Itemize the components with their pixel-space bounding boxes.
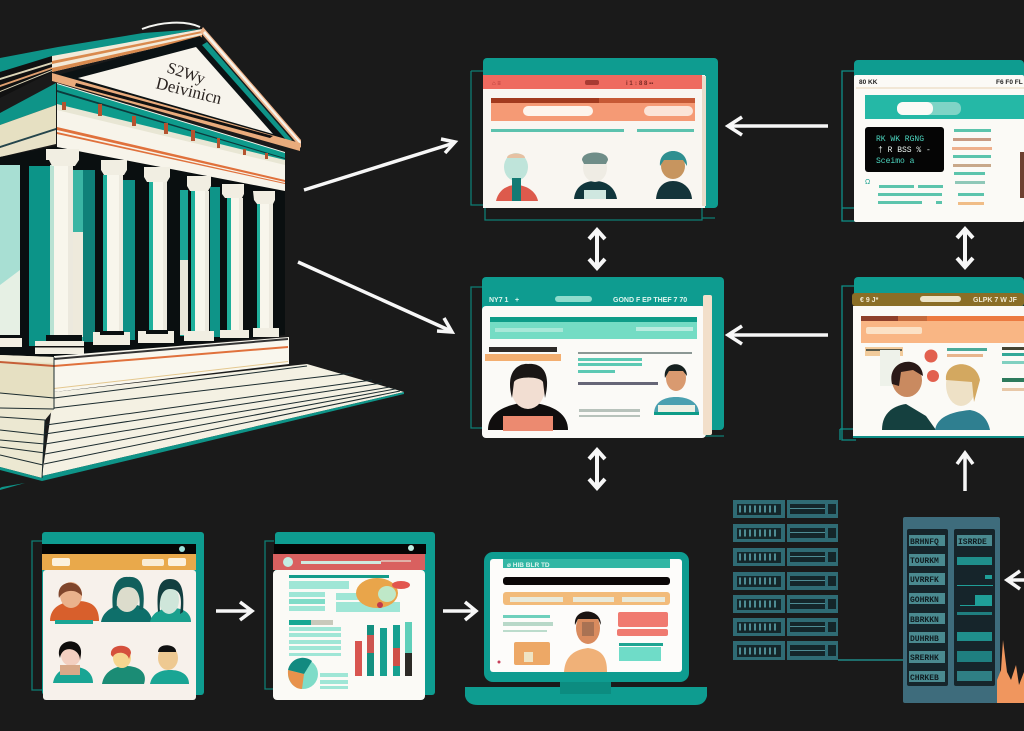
left cells	[909, 535, 945, 683]
right cells: ISRRDE	[958, 538, 987, 547]
small portrait	[654, 364, 699, 415]
top highlight stroke	[142, 23, 200, 29]
panel: top center web window	[471, 58, 718, 220]
two portraits	[880, 350, 990, 430]
column 6	[253, 191, 279, 337]
column 5	[220, 184, 249, 338]
arrow: right edge into cabinet	[1007, 571, 1024, 589]
left cells: GOHRKN	[910, 596, 939, 605]
portrait 3	[656, 151, 692, 199]
partial left column	[0, 335, 22, 347]
header bar: € 9 J*	[860, 297, 879, 304]
panel: dashboard window	[265, 532, 435, 700]
left cells: CHRKEB	[910, 674, 939, 683]
teal banner	[865, 95, 1024, 119]
black text box: † R BSS % -	[878, 146, 931, 155]
header bar	[483, 75, 702, 89]
left cells: BRHNFQ	[910, 538, 939, 547]
arrow: vertical double lower center	[589, 450, 605, 488]
header bar: GLPK 7 W JF	[973, 297, 1018, 304]
orange banner	[861, 316, 1024, 343]
black text box: RK WK RGNG	[876, 135, 924, 144]
row 7	[733, 641, 838, 660]
row 2	[733, 524, 838, 542]
row 5	[733, 595, 838, 613]
pie chart	[288, 658, 318, 689]
stylobate	[0, 337, 289, 408]
pediment inscription: Deivinicn	[154, 73, 224, 108]
orange banner	[491, 98, 695, 121]
panel: top right web window	[842, 60, 1024, 222]
arrow: vertical double right	[957, 229, 973, 267]
laptop screen: ø HIB BLR TD	[507, 562, 550, 569]
orange hand-shaped peak	[997, 640, 1024, 703]
column 4	[184, 176, 214, 341]
teal banner	[490, 317, 697, 339]
temple roof side	[0, 29, 200, 157]
row 1	[733, 500, 838, 518]
left cells: DUHRHB	[910, 635, 939, 644]
black text box	[865, 127, 944, 172]
person 5	[102, 646, 145, 684]
column 3	[138, 167, 174, 343]
arrow: temple to middle window	[298, 262, 452, 332]
colonnade backdrop	[0, 146, 285, 358]
laptop stand	[560, 680, 611, 694]
row 4	[733, 572, 838, 590]
header labels: GOND F EP THEF 7 70	[613, 297, 687, 304]
right cells	[957, 535, 993, 681]
person 2	[101, 577, 152, 622]
frieze	[57, 83, 285, 191]
person 3	[150, 579, 191, 622]
person 6	[150, 645, 189, 684]
column 2	[93, 160, 130, 345]
orange nav bar	[42, 554, 196, 570]
header labels: F6 F0 FL	[996, 79, 1023, 86]
left cells: SRERHK	[910, 654, 939, 663]
row 3	[733, 548, 838, 566]
header bar: i 1 ↕ 8 8 ▪▪	[626, 81, 653, 87]
server cabinet	[903, 517, 1000, 703]
header bar: ⌂ ≡	[492, 81, 501, 87]
bar chart	[355, 622, 412, 676]
large portrait	[488, 364, 568, 431]
pediment inscription: S2Wy	[165, 60, 207, 88]
text panels	[289, 575, 400, 689]
baseline	[853, 436, 1024, 438]
person 4	[53, 641, 93, 683]
portrait 1	[496, 153, 538, 201]
column 1	[35, 149, 84, 354]
panel: middle center web window	[471, 277, 724, 438]
arrow: middle right to middle center	[728, 326, 828, 344]
small bars	[865, 347, 1024, 391]
left cells: TOURKM	[910, 557, 939, 566]
text lines: Ω	[865, 179, 870, 186]
red nav bar	[273, 554, 425, 570]
donut chart	[356, 578, 410, 608]
laptop screen	[490, 559, 682, 672]
black top bar	[274, 544, 426, 554]
row 6	[733, 618, 838, 636]
arrow: server to middle right window	[957, 453, 973, 491]
connector line	[838, 659, 903, 661]
black text box: Sceimo a	[876, 157, 915, 166]
black top bar	[42, 544, 196, 554]
temple building illustration	[0, 23, 404, 490]
header labels: 80 KK	[859, 79, 878, 86]
header bar	[852, 293, 1024, 306]
temple steps	[0, 357, 404, 490]
laptop	[465, 552, 707, 705]
person 1	[50, 582, 99, 624]
label bars	[485, 347, 561, 361]
text lines	[578, 352, 692, 417]
pediment	[52, 27, 301, 151]
text lines	[865, 129, 992, 205]
left cells: BBRKKN	[910, 616, 939, 625]
roof cornice stripes	[52, 29, 202, 72]
header labels: NY7 1	[489, 297, 509, 304]
header labels: +	[515, 297, 519, 304]
arrow: dashboard window to laptop	[443, 602, 476, 620]
left cells: UVRRFK	[910, 576, 939, 585]
laptop base	[465, 687, 707, 705]
header labels	[859, 79, 1023, 86]
laptop frame	[484, 552, 689, 682]
header labels	[489, 296, 687, 304]
portrait grid	[50, 577, 191, 684]
panel: middle right web window	[840, 277, 1024, 440]
teal lines	[491, 129, 694, 132]
arrow: top right to top center	[728, 117, 828, 135]
arrow: temple to top window	[304, 139, 455, 190]
portrait 2	[574, 152, 617, 199]
arrow: grid window to dashboard window	[216, 602, 252, 620]
panel: people grid window	[32, 532, 204, 700]
arrow: vertical double top center	[589, 230, 605, 268]
server rack rows	[733, 500, 838, 660]
partial portrait	[1020, 152, 1024, 198]
red dots	[924, 350, 939, 382]
